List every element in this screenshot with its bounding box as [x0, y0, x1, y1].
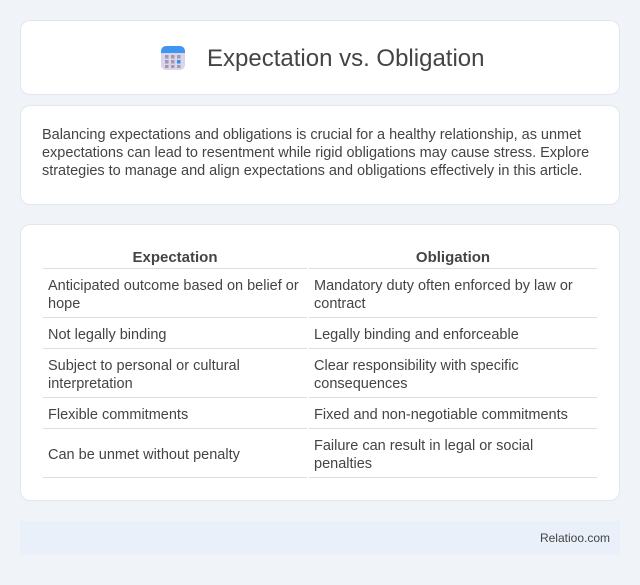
row text — [314, 278, 573, 312]
column: Obligation — [309, 249, 597, 478]
row text — [48, 358, 240, 392]
panel: comparison table — [20, 224, 620, 501]
row text: Mandatory duty often enforced by law or — [314, 278, 573, 294]
intro text: strategies to manage and align expectations and obligations effectively in this article. — [42, 163, 582, 179]
row text: interpretation — [48, 376, 133, 392]
row text: hope — [48, 296, 80, 312]
row text: Fixed and non-negotiable commitments — [314, 407, 568, 423]
row text: penalties — [314, 456, 372, 472]
footer bar — [20, 521, 620, 555]
row text: Flexible commitments — [48, 407, 188, 423]
row text: contract — [314, 296, 366, 312]
row text: Legally binding and enforceable — [314, 327, 519, 343]
row text — [314, 358, 519, 392]
row text — [314, 438, 533, 472]
row text — [48, 278, 299, 312]
row text: Not legally binding — [48, 327, 166, 343]
panel: title header — [20, 20, 620, 95]
row text: Failure can result in legal or social — [314, 438, 533, 454]
intro text: expectations can lead to resentment while rigid obligations may cause stress. Explore — [42, 145, 589, 161]
row text: Anticipated outcome based on belief or — [48, 278, 299, 294]
title: Expectation vs. Obligation — [207, 45, 484, 72]
intro text: Balancing expectations and obligations is crucial for a healthy relationship, as unmet — [42, 127, 581, 143]
row text: Can be unmet without penalty — [48, 447, 240, 463]
heading: Obligation: Obligation — [416, 249, 490, 266]
panel: introduction — [20, 105, 620, 205]
heading: Expectation: Expectation — [132, 249, 218, 266]
intro text — [42, 127, 589, 179]
row text: consequences — [314, 376, 408, 392]
footer brand: Relatioo.com — [540, 531, 610, 545]
row text: Subject to personal or cultural — [48, 358, 240, 374]
row text: Clear responsibility with specific — [314, 358, 519, 374]
column: Expectation — [43, 249, 307, 478]
icon: calendar — [161, 46, 185, 70]
